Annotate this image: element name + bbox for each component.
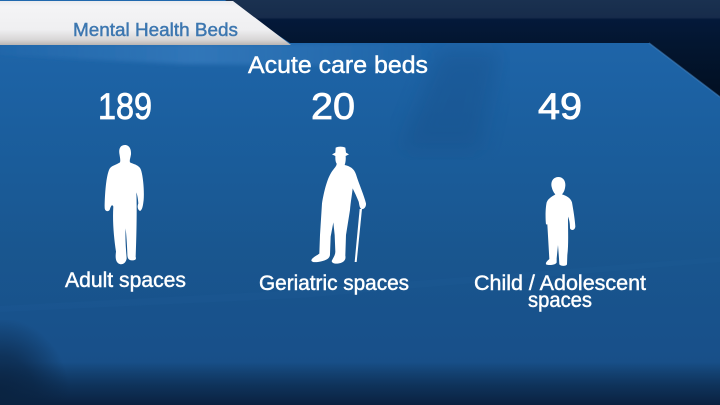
header edge highlight — [649, 43, 720, 97]
dark top header band — [225, 0, 720, 97]
column: geriatric — [259, 86, 409, 295]
number: 49: 49 — [538, 86, 582, 127]
label: geriatric spaces: Geriatric spaces — [259, 272, 409, 295]
label: child / adolescent spaces: Child / Adolescent — [474, 272, 646, 295]
heading: acute care beds: Acute care beds — [248, 52, 428, 79]
column: child — [474, 86, 646, 312]
number: 189: 189 — [98, 86, 152, 127]
label: child / adolescent spaces: spaces — [528, 289, 592, 312]
column: adult — [65, 86, 186, 292]
icon: geriatric silhouette with cane — [311, 147, 366, 264]
number: 20: 20 — [311, 86, 355, 127]
title: Mental Health Beds — [73, 20, 238, 40]
icon: child silhouette — [546, 177, 575, 266]
label: child / adolescent spaces — [474, 272, 646, 312]
icon: adult silhouette — [105, 145, 144, 264]
title tab — [0, 1, 291, 45]
label: adult spaces: Adult spaces — [65, 269, 186, 292]
